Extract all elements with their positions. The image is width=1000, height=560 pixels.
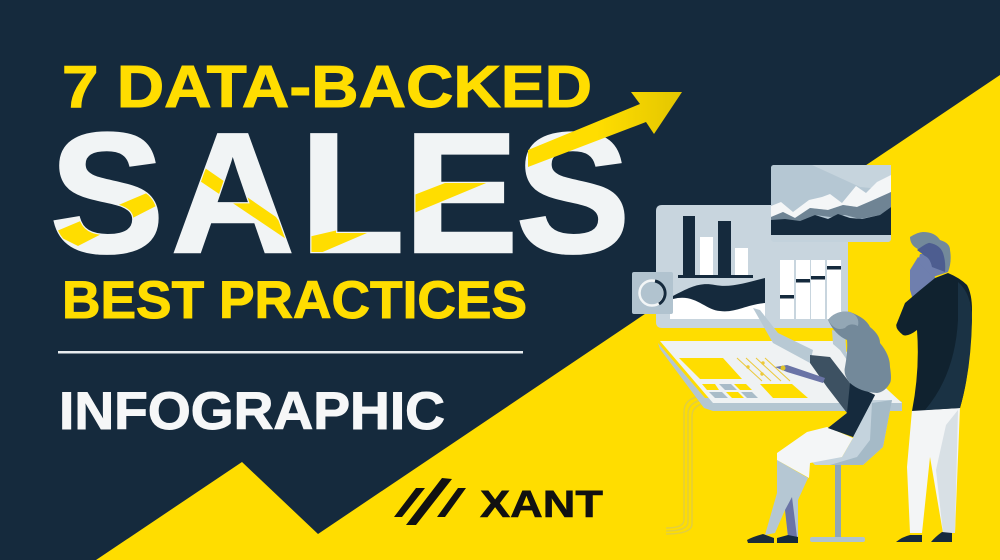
illustration <box>632 165 972 543</box>
hair <box>910 232 951 272</box>
heading: sales: SALES <box>50 98 630 289</box>
face <box>832 330 847 360</box>
heading: 7 data-backed: 7 DATA-BACKED <box>62 54 592 120</box>
logo text: XANT <box>480 484 603 526</box>
seated woman <box>747 308 892 543</box>
monitor panel <box>656 205 848 328</box>
torso <box>810 355 875 437</box>
level bars <box>780 260 841 319</box>
arm raised <box>753 308 813 363</box>
divider <box>58 351 523 354</box>
shoes <box>896 535 922 542</box>
hair <box>828 312 891 393</box>
legs <box>765 460 808 537</box>
arm to desk <box>775 365 825 383</box>
logo: XANT <box>394 478 603 526</box>
arrow stripes through letters <box>52 166 503 254</box>
yellow diagonal shape <box>96 75 1000 560</box>
bar chart <box>678 216 753 278</box>
skirt <box>777 427 853 478</box>
desk sliders <box>737 358 790 381</box>
desk <box>658 341 902 411</box>
heading: sales <box>54 131 625 255</box>
torso <box>896 273 972 411</box>
logo icon <box>394 478 466 525</box>
trousers <box>907 407 960 533</box>
arrow <box>528 92 682 167</box>
chair <box>810 400 892 465</box>
wave chart <box>670 278 765 319</box>
desk legs <box>666 396 708 534</box>
heading: infographic: INFOGRAPHIC <box>59 382 445 441</box>
neck and arm <box>910 257 935 300</box>
standing man <box>896 232 972 542</box>
shoes <box>747 534 774 543</box>
head <box>918 254 948 277</box>
line chart panel <box>771 165 891 242</box>
desk yellow tiles <box>679 358 808 398</box>
donut card <box>632 272 673 314</box>
heading: best practices: BEST PRACTICES <box>62 271 527 330</box>
